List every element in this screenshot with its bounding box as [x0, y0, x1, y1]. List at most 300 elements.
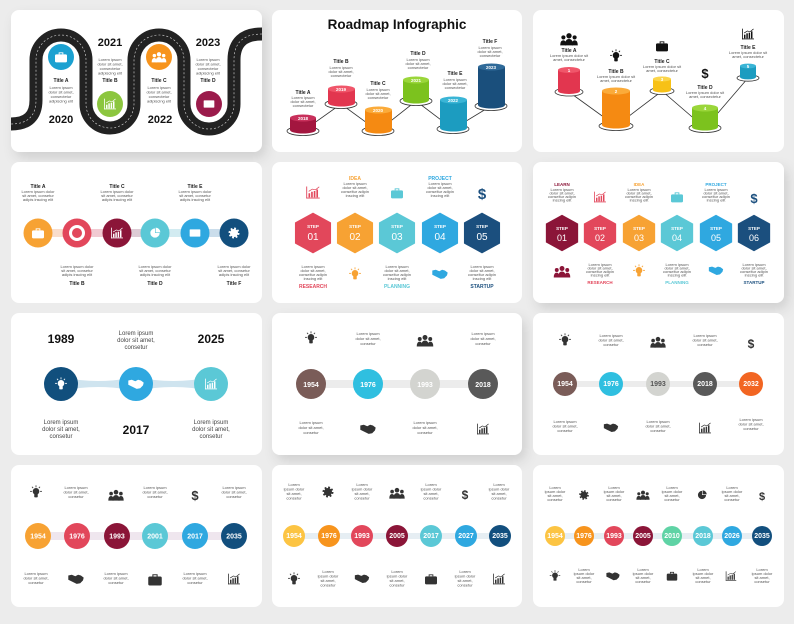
titles: Lorem ipsum dolor sit — [643, 64, 682, 69]
card: seven-year timeline: ipsum dolor — [318, 574, 339, 578]
card: five step hexagons: conseltur adipin — [299, 272, 327, 277]
icons: $ — [462, 488, 469, 502]
year labels: 2018 — [298, 116, 309, 121]
card: five step hexagons: Lorem ipsum — [343, 181, 367, 186]
road labels: Title A — [53, 78, 69, 84]
circles: 1954 — [286, 533, 302, 540]
card: seven-year timeline: Lorem — [425, 482, 437, 487]
card: seven-year timeline: sit amet, — [354, 491, 370, 496]
circles — [545, 526, 772, 546]
card: six-year timeline: consetur — [147, 494, 163, 499]
card: six step hexagons: conseltur adipin — [740, 269, 768, 274]
titles: Lorem ipsum — [443, 77, 467, 82]
road labels: dolor sit amet, — [195, 62, 221, 66]
card: six step hexagons: conseltur adipin — [586, 269, 614, 274]
titles: consectetur — [331, 73, 352, 78]
titles: Lorem ipsum dolor sit — [729, 50, 768, 55]
icons — [560, 29, 754, 81]
card: four-year timeline: consetur — [303, 430, 319, 435]
circles: 1976 — [360, 382, 376, 389]
card: six step hexagons: 03 — [634, 233, 644, 243]
card: five step hexagons: dolor sit amet, — [469, 268, 495, 273]
card: six step hexagons: 02 — [595, 233, 605, 243]
card: six step hexagons: dolor sit amet, — [587, 266, 613, 270]
card: six step hexagons: dolor sit amet, — [703, 190, 729, 196]
card: eight-year timeline: sit amet, — [547, 493, 563, 498]
card: five step hexagons: conseltur adipin — [468, 272, 496, 277]
card: eight-year timeline: sit amet, — [576, 575, 592, 580]
titles: Title E — [188, 184, 203, 190]
titles: Lorem ipsum dolor — [217, 264, 251, 269]
years and text: dolor sit amet, — [117, 338, 155, 344]
year labels: 2021 — [411, 78, 422, 83]
card: six step hexagons: 04 — [672, 233, 682, 243]
card: six step hexagons: inscing elit — [707, 198, 726, 202]
card: five step hexagons: 01 — [307, 232, 319, 243]
icon: briefcase circle A — [48, 44, 74, 70]
card: eight-year timeline: Lorem — [549, 485, 561, 490]
card: eight-year timeline: Lorem — [666, 485, 678, 490]
road labels: 2023 — [196, 37, 220, 49]
card: numbered cylinders: 2 — [615, 89, 618, 94]
card: seven-year timeline: sit amet, — [389, 578, 405, 583]
card: six step hexagons: 06 — [749, 233, 759, 243]
years and text: consetur — [124, 345, 148, 351]
card: six step hexagons: STEP — [556, 226, 568, 231]
card: six-year timeline: Lorem ipsum — [183, 571, 207, 576]
card: five step hexagons: Lorem ipsum — [428, 181, 452, 186]
card: six step hexagons: 05 — [711, 233, 721, 243]
titles: Title B — [69, 281, 85, 287]
circles: 2001 — [147, 534, 163, 540]
card: seven-year timeline: ipsum dolor — [489, 486, 510, 492]
card: six step hexagons: STEP — [710, 226, 722, 231]
labels: STARTUP — [470, 284, 494, 290]
card: six-year timeline — [11, 465, 262, 607]
titles: consectetur — [445, 85, 466, 90]
titles: Lorem ipsum dolor — [21, 189, 55, 194]
circles: 2027 — [458, 533, 474, 540]
card: five step hexagons: 05 — [476, 232, 488, 243]
titles: sit amet, consetur — [139, 268, 171, 273]
card: numbered cylinders: 4 — [704, 106, 707, 111]
card: six step hexagons: STEP — [748, 226, 760, 231]
card: five step hexagons: 02 — [349, 232, 361, 243]
icons: $ — [750, 191, 758, 206]
years and text: dolor sit amet, — [192, 427, 230, 433]
card: eight-year timeline: Lorem — [578, 567, 590, 572]
road labels: 2021 — [98, 37, 122, 49]
road labels: Lorem ipsum — [147, 85, 171, 90]
card: five step hexagons: conseltur adipin — [341, 189, 369, 194]
card: five-year timeline: dolor sit amet, — [598, 338, 624, 342]
card: five-year timeline: consetur — [743, 426, 759, 431]
card: four-year timeline: dolor sit amet, — [298, 425, 324, 430]
titles: adipis inscing elit — [180, 197, 211, 202]
years and text — [42, 331, 230, 440]
card: five-year timeline: consetur — [603, 342, 619, 347]
card: seven-year timeline: consetur — [320, 582, 336, 588]
circles: 1993 — [354, 533, 370, 540]
card: six-year timeline: dolor sit amet, — [23, 576, 49, 580]
circles: 1993 — [109, 534, 125, 540]
titles: sit amet, consetur — [22, 193, 54, 198]
hexagons — [546, 215, 770, 251]
card: seven-year timeline: sit amet, — [320, 578, 336, 583]
card: five-year timeline: Lorem ipsum — [646, 419, 670, 424]
card: eight-year timeline: sit amet, — [635, 575, 651, 580]
card: six step hexagons: inscing elit — [745, 272, 764, 278]
card: five step hexagons: inscing elit — [388, 276, 407, 281]
connector lines — [569, 78, 748, 128]
road labels: consectetur — [51, 94, 72, 99]
titles: sit amet, consetur — [101, 193, 133, 198]
titles: Lorem ipsum dolor sit — [597, 74, 636, 79]
road labels: consectetur — [100, 66, 121, 71]
card: six-year timeline: dolor sit amet, — [142, 490, 168, 494]
titles: amet, consectetur — [553, 57, 586, 62]
card: six-year timeline: dolor sit amet, — [182, 576, 208, 580]
titles: amet, consectetur — [646, 68, 679, 73]
titles: Lorem ipsum — [478, 45, 502, 50]
circles: 2005 — [635, 533, 651, 540]
road labels: adipiscing elit — [147, 98, 172, 104]
card: five-year timeline: consetur — [697, 342, 713, 347]
card: six-year timeline: Lorem ipsum — [64, 485, 88, 490]
card: seven-year timeline — [272, 465, 522, 607]
circles: 2017 — [423, 533, 439, 540]
years and text: Lorem ipsum — [119, 331, 153, 337]
road labels: Title D — [200, 78, 216, 84]
card: six-year timeline: consetur — [28, 580, 44, 585]
card: five-year timeline: Lorem ipsum — [599, 333, 623, 338]
card: five step hexagons: Lorem ipsum — [301, 264, 325, 269]
card: four-year timeline: consetur — [417, 430, 433, 435]
card: five step hexagons: conseltur adipin — [426, 189, 454, 194]
road labels: 2020 — [49, 114, 73, 126]
card: five-year timeline: dolor sit amet, — [645, 424, 671, 428]
card: three-point timeline 1989-2025 — [11, 313, 262, 455]
titles: adipis inscing elit — [62, 272, 93, 277]
card: five step hexagons: STEP — [391, 224, 403, 229]
titles — [550, 45, 768, 99]
titles: Title B — [333, 59, 349, 65]
card: seven-year timeline: Lorem — [322, 569, 334, 574]
card: six step hexagons: dolor sit amet, — [626, 190, 652, 196]
card: numbered cylinders — [533, 10, 784, 152]
card: six step hexagons: Lorem ipsum — [588, 262, 612, 267]
card: eight-year timeline: Lorem — [726, 485, 738, 490]
icons: $ — [701, 66, 709, 81]
card: six step hexagons: inscing elit — [668, 272, 687, 278]
card: roadmap infographic cylinders — [272, 10, 522, 152]
card: eight-year timeline: consetur — [754, 579, 770, 584]
card: five step hexagons: inscing elit — [304, 276, 323, 281]
titles: Lorem ipsum dolor — [100, 189, 134, 194]
labels: IDEA — [634, 182, 645, 187]
card: six step hexagons: dolor sit amet, — [664, 266, 690, 270]
icons: $ — [191, 488, 199, 503]
card: six icon circles with titles — [11, 162, 262, 303]
card: five step hexagons: dolor sit amet, — [342, 185, 368, 190]
card: six step hexagons: Lorem ipsum — [550, 187, 574, 192]
card: numbered cylinders: 5 — [747, 64, 750, 69]
card: seven-year timeline: Lorem — [356, 482, 368, 487]
icons — [30, 485, 240, 586]
titles: Title D — [410, 51, 426, 57]
card: six step hexagons: conseltur adipin — [663, 269, 691, 274]
titles: Lorem ipsum — [291, 95, 315, 100]
circles: 1954 — [557, 381, 573, 388]
titles: consectetur — [368, 95, 389, 100]
card: five-year timeline: consetur — [650, 428, 666, 433]
titles: Title F — [227, 281, 241, 287]
titles: Title C — [370, 81, 386, 87]
card: four-year timeline: dolor sit amet, — [355, 336, 381, 341]
card: five step hexagons: dolor sit amet, — [300, 268, 326, 273]
circles — [44, 367, 228, 401]
card: five step hexagons: STEP — [476, 224, 488, 229]
card: seven-year timeline: consetur — [354, 496, 370, 500]
card: seven-year timeline: ipsum dolor — [352, 486, 373, 492]
hexagons — [295, 213, 500, 253]
card: eight-year timeline: consetur — [576, 579, 592, 584]
card: five step hexagons: dolor sit amet, — [384, 268, 410, 273]
card: six-year timeline: dolor sit amet, — [221, 490, 247, 494]
titles: Title D — [147, 281, 163, 287]
card: seven-year timeline: consetur — [491, 496, 507, 500]
circles — [553, 372, 763, 396]
card: four-year timeline: Lorem ipsum — [356, 331, 380, 336]
titles: Title D — [697, 85, 713, 91]
cylinders — [555, 64, 759, 132]
card: eight-year timeline: consetur — [547, 497, 563, 502]
circles: 2010 — [664, 533, 680, 540]
circles: 2032 — [743, 381, 759, 388]
labels — [299, 176, 494, 290]
circles: 1954 — [30, 534, 46, 540]
icons — [288, 488, 505, 584]
card: six-year timeline: Lorem ipsum — [104, 571, 128, 576]
card: seven-year timeline: Lorem — [459, 569, 471, 574]
titles: adipis inscing elit — [140, 272, 171, 277]
year labels: 2020 — [373, 108, 384, 113]
card: seven-year timeline: consetur — [423, 496, 439, 500]
card: four-year timeline: dolor sit amet, — [412, 425, 438, 430]
titles — [21, 184, 251, 287]
circles — [296, 369, 498, 399]
card: four-year timeline — [272, 313, 522, 455]
labels: LEARN — [554, 182, 570, 187]
circles: 2018 — [475, 382, 491, 389]
card: five step hexagons: Lorem ipsum — [470, 264, 494, 269]
circles: 1954 — [303, 382, 319, 389]
icon: envelope circle D — [196, 91, 222, 117]
road labels: dolor sit amet, — [48, 90, 74, 94]
card: five step hexagons: inscing elit — [473, 276, 492, 281]
card: five step hexagons: STEP — [349, 224, 361, 229]
road labels: adipiscing elit — [98, 70, 123, 76]
titles: dolor sit amet, — [477, 49, 503, 54]
titles: amet, consectetur — [600, 78, 633, 83]
card: five step hexagons: 04 — [434, 232, 446, 243]
card: eight-year timeline: consetur — [724, 497, 740, 502]
card: seven-year timeline: sit amet, — [423, 491, 439, 496]
card: six step hexagons: Lorem ipsum — [742, 262, 766, 267]
card: six step hexagons: Lorem ipsum — [665, 262, 689, 267]
card: seven-year timeline: ipsum dolor — [421, 486, 442, 492]
card: six step hexagons: inscing elit — [591, 272, 610, 278]
card: five-year timeline: dolor sit amet, — [692, 338, 718, 342]
road labels: consectetur — [149, 94, 170, 99]
circles: 2035 — [492, 533, 508, 540]
circles: 1976 — [603, 381, 619, 388]
circles: 2005 — [389, 533, 405, 540]
titles: dolor sit amet, — [328, 69, 354, 74]
card: six step hexagons: dolor sit amet, — [549, 190, 575, 196]
labels: PROJECT — [428, 176, 452, 182]
connector lines — [303, 101, 491, 131]
titles: dolor sit amet, — [290, 99, 316, 104]
card: five step hexagons: 03 — [391, 232, 403, 243]
card: seven-year timeline: consetur — [457, 582, 473, 588]
card: eight-year timeline: consetur — [606, 497, 622, 502]
card: six step hexagons: dolor sit amet, — [741, 266, 767, 270]
card: eight-year timeline: ipsum dolor — [545, 489, 566, 494]
card: winding road roadmap — [11, 10, 262, 152]
card: seven-year timeline: Lorem — [288, 482, 300, 487]
titles: Title A — [30, 184, 46, 190]
card: six step hexagons: inscing elit — [553, 198, 572, 202]
titles: Lorem ipsum dolor — [60, 264, 94, 269]
years and text: 1989 — [48, 332, 75, 346]
circles: 1976 — [576, 533, 592, 540]
icons — [554, 191, 758, 278]
circles: 2018 — [695, 533, 711, 540]
titles: adipis inscing elit — [102, 197, 133, 202]
card: eight-year timeline: ipsum dolor — [693, 571, 714, 576]
road labels: Title B — [102, 78, 118, 84]
years and text: dolor sit amet, — [42, 427, 80, 433]
titles: dolor sit amet, — [405, 61, 431, 66]
labels: RESEARCH — [299, 284, 327, 290]
years and text: consetur — [199, 434, 223, 440]
card: five step hexagons: Lorem ipsum — [385, 264, 409, 269]
card: eight-year timeline: sit amet, — [724, 493, 740, 498]
titles: Title A — [561, 48, 577, 54]
titles: adipis inscing elit — [23, 197, 54, 202]
icons: $ — [478, 186, 487, 203]
card: five step hexagons — [272, 162, 522, 303]
titles: Title A — [295, 90, 311, 96]
card: five step hexagons: dolor sit amet, — [427, 185, 453, 190]
years and text: consetur — [49, 434, 73, 440]
road labels: 2022 — [148, 114, 172, 126]
card: five-year timeline: Lorem ipsum — [693, 333, 717, 338]
icon circles — [24, 218, 248, 248]
card: eight-year timeline: Lorem — [756, 567, 768, 572]
card: six step hexagons: Lorem ipsum — [704, 187, 728, 192]
labels: PROJECT — [705, 182, 727, 187]
card: six step hexagons: conseltur adipin — [625, 194, 653, 199]
card: seven-year timeline: ipsum dolor — [455, 574, 476, 578]
road labels: Title C — [151, 78, 167, 84]
card: five step hexagons: STEP — [434, 224, 446, 229]
circles: 1993 — [417, 382, 433, 389]
titles: Lorem ipsum dolor — [178, 189, 212, 194]
circles: 1993 — [606, 533, 622, 540]
card: eight-year timeline: sit amet, — [754, 575, 770, 580]
card: five step hexagons: inscing elit — [346, 193, 365, 198]
card: eight-year timeline: consetur — [664, 497, 680, 502]
year labels: 2022 — [448, 98, 459, 103]
icons — [306, 186, 487, 279]
titles: consectetur — [408, 65, 429, 70]
circles: 2035 — [226, 534, 242, 540]
icons — [550, 490, 765, 581]
card: seven-year timeline: ipsum dolor — [387, 574, 408, 578]
titles: Title E — [448, 71, 463, 77]
titles: adipis inscing elit — [219, 272, 250, 277]
card: five step hexagons: conseltur adipin — [383, 272, 411, 277]
circles — [25, 523, 247, 549]
card: six-year timeline: Lorem ipsum — [143, 485, 167, 490]
titles: sit amet, consetur — [218, 268, 250, 273]
labels — [554, 182, 764, 285]
card: four-year timeline: dolor sit amet, — [470, 336, 496, 341]
card: four-year timeline: Lorem ipsum — [413, 420, 437, 425]
connectors — [50, 229, 223, 237]
icons — [559, 333, 755, 433]
card: seven-year timeline: ipsum dolor — [284, 486, 305, 492]
card: four-year timeline: consetur — [360, 341, 376, 346]
titles: dolor sit amet, — [442, 81, 468, 86]
road labels: dolor sit amet, — [146, 90, 172, 94]
card: seven-year timeline: consetur — [286, 496, 302, 500]
road labels: dolor sit amet, — [97, 62, 123, 66]
card: six-year timeline: dolor sit amet, — [103, 576, 129, 580]
card: five step hexagons: STEP — [307, 224, 319, 229]
titles: sit amet, consetur — [179, 193, 211, 198]
card: six-year timeline: dolor sit amet, — [63, 490, 89, 494]
card: six step hexagons: STEP — [671, 226, 683, 231]
card: five-year timeline: consetur — [557, 428, 573, 433]
road — [11, 34, 262, 129]
road labels: Lorem ipsum — [49, 85, 73, 90]
titles: consectetur — [480, 53, 501, 58]
icons: $ — [748, 337, 755, 351]
circles: 2035 — [754, 533, 770, 540]
card: seven-year timeline: consetur — [389, 582, 405, 588]
icons — [305, 331, 489, 434]
titles: amet, consectetur — [689, 94, 722, 99]
card: seven-year timeline: Lorem — [493, 482, 505, 487]
card: six step hexagons: STEP — [594, 226, 606, 231]
card: six-year timeline: Lorem ipsum — [24, 571, 48, 576]
card: eight-year timeline: Lorem — [608, 485, 620, 490]
card: six step hexagons: Lorem ipsum — [627, 187, 651, 192]
card: six step hexagons: conseltur adipin — [548, 194, 576, 199]
card: eight-year timeline: ipsum dolor — [722, 489, 743, 494]
years and text: Lorem ipsum — [44, 420, 78, 426]
circles: 2018 — [697, 381, 713, 388]
card: six-year timeline: consetur — [226, 494, 242, 499]
card: five-year timeline: Lorem ipsum — [739, 417, 763, 422]
card: numbered cylinders: 3 — [661, 77, 664, 82]
card: eight-year timeline: sit amet, — [664, 493, 680, 498]
icons: $ — [759, 491, 765, 503]
card: six step hexagons: STEP — [633, 226, 645, 231]
